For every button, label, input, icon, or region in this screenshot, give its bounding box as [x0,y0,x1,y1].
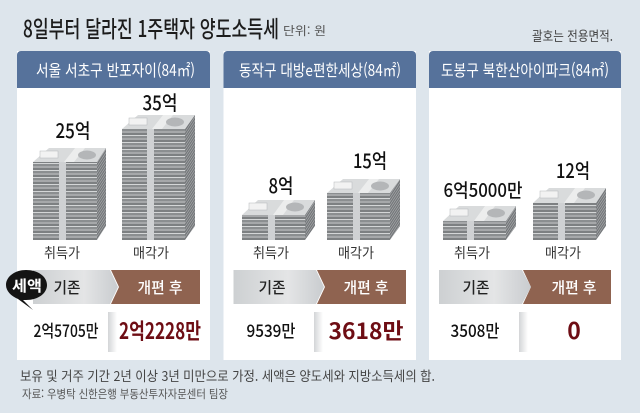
after tab: 개편 후 [552,276,596,298]
icon: money stack medium [327,179,400,240]
panel heading [429,51,621,88]
tax after value: 2억2228만 [119,314,201,346]
panel heading: 도봉구 북한산아이파크(84㎡) [441,57,609,81]
tax before value: 2억5705만 [34,317,99,342]
callout: tax amount bubble: 세액 [12,275,42,296]
panel: Bukhansan I-Park [429,51,621,360]
after tab [111,270,200,304]
after tab [523,270,611,304]
caption acquisition: 취득가 [253,243,289,263]
icon: money stack small [443,206,516,240]
icon: money stack medium [533,188,606,240]
icon: money stack large [122,115,195,240]
price label 12: 12억 [556,155,590,184]
price label 8: 8억 [268,170,294,199]
price label 6.5: 6억5000만 [444,176,522,203]
tax after value: 3618만 [328,314,404,346]
source: 자료: 우병탁 신한은행 부동산투자자문센터 팀장 [22,386,228,402]
caption sale: 매각가 [545,243,581,263]
before tab [33,270,118,304]
after tab: 개편 후 [138,276,182,298]
area note: 괄호는 전용면적. [532,25,613,45]
tax before value: 9539만 [246,317,296,342]
before tab: 기존 [54,276,80,298]
panel: Daebang e-Pyeonhansesang [224,51,416,360]
icon: money stack small [242,200,315,240]
before tab [439,270,531,304]
panel heading: 서울 서초구 반포자이(84㎡) [36,57,195,81]
panel heading [224,51,416,88]
tax before value: 3508만 [450,317,500,342]
caption acquisition: 취득가 [44,243,80,263]
after tab: 개편 후 [344,276,388,298]
before tab: 기존 [258,276,286,298]
divider strip [314,312,323,352]
icon: money stack small [33,148,106,240]
price label 35: 35억 [142,87,178,116]
caption sale: 매각가 [338,243,374,263]
before tab [234,270,324,304]
panel: Banpo Xi [17,51,210,360]
callout: tax amount bubble [6,270,47,310]
after tab [317,270,406,304]
caption acquisition: 취득가 [454,243,490,263]
title: 8일부터 달라진 1주택자 양도소득세 [23,10,279,44]
panel heading: 동작구 대방e편한세상(84㎡) [239,57,401,81]
divider strip [519,312,528,352]
divider strip [108,312,117,352]
unit label: 단위: 원 [283,22,326,39]
panel heading [17,51,210,88]
before tab: 기존 [462,276,490,298]
price label 25: 25억 [56,115,90,144]
tax after value: 0 [567,312,581,346]
price label 15: 15억 [353,145,387,174]
footnote: 보유 및 거주 기간 2년 이상 3년 미만으로 가정. 세액은 양도세와 지방소득세의 합. [20,365,435,385]
caption sale: 매각가 [133,243,169,263]
